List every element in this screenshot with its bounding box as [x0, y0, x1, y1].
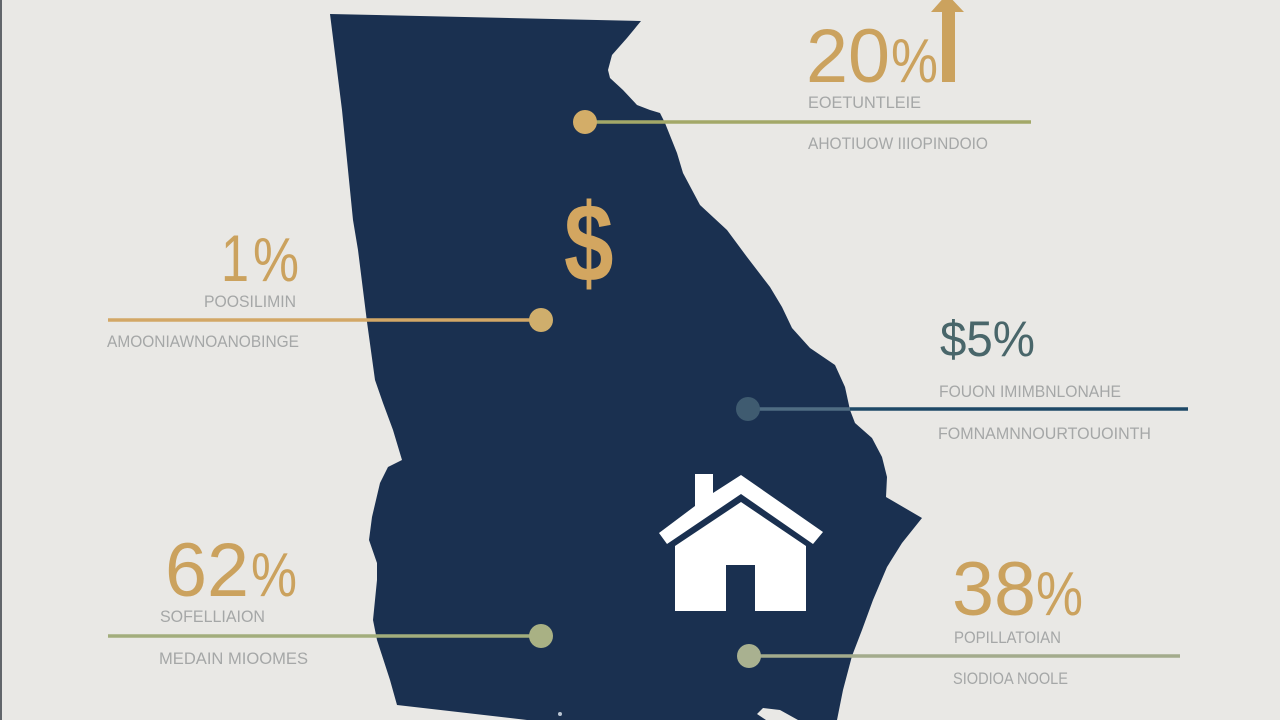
label: right second: FOMNAMNNOURTOUOINTH — [938, 425, 1151, 443]
stat: 38%: % — [1036, 560, 1083, 629]
stat: 20% — [806, 14, 938, 99]
stat: 20%: 20 — [806, 14, 890, 99]
icon: house — [659, 474, 823, 611]
callout: 1% left — [107, 221, 553, 351]
label: left first: POOSILIMIN — [204, 293, 296, 311]
callout: 20% top right — [573, 0, 1031, 153]
label: bottom left second: MEDAIN MIOOMES — [159, 650, 308, 668]
label: bottom left first: SOFELLIAION — [160, 608, 265, 626]
connector: bottom left — [108, 624, 553, 648]
decorative dot — [558, 712, 562, 716]
callout: $5% right — [736, 311, 1188, 443]
label: top right second: AHOTIUOW IIIOPINDOIO — [808, 135, 988, 153]
icon: dollar sign: $ — [564, 182, 613, 305]
connector: right navy — [736, 397, 1188, 421]
callout: 38% bottom right — [737, 547, 1180, 688]
icon: up arrow — [931, 0, 964, 82]
label: bottom right first: POPILLATOIAN — [954, 629, 1061, 647]
callout: 62% bottom left — [108, 528, 553, 668]
label: right first: FOUON IMIMBNLONAHE — [939, 383, 1121, 401]
label: bottom right second: SIODIOA NOOLE — [953, 670, 1068, 688]
stat: 1%: % — [253, 226, 299, 295]
stat: 62% — [165, 528, 297, 613]
stat: 1%: 1 — [221, 221, 249, 295]
label: left second: AMOONIAWNOANOBINGE — [107, 333, 299, 351]
stat: $5%: $5% — [940, 311, 1035, 367]
map: Georgia state silhouette — [330, 14, 922, 720]
connector: top right — [573, 110, 1031, 134]
stat: 62%: 62 — [165, 528, 249, 613]
stat: 62%: % — [251, 541, 297, 610]
label: top right first: EOETUNTLEIE — [808, 94, 921, 112]
stat: 38% — [952, 547, 1083, 632]
connector: bottom right — [737, 644, 1180, 668]
stat: 20%: % — [891, 27, 938, 96]
connector: left orange — [108, 308, 553, 332]
stat: 1% — [221, 221, 299, 295]
stat: 38%: 38 — [952, 547, 1036, 632]
